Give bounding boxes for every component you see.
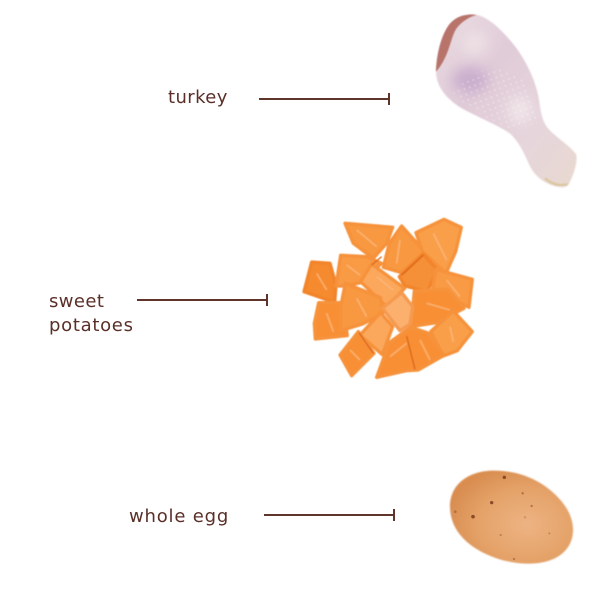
icon: sweet potato cubes <box>304 219 472 377</box>
connector line: sweet potatoes <box>137 294 267 306</box>
icon: egg <box>450 471 573 564</box>
connector line: turkey <box>259 93 389 105</box>
label: sweet potatoes <box>49 291 134 336</box>
label: sweet potatoes: potatoes <box>49 315 134 336</box>
label: sweet potatoes: sweet <box>49 291 104 312</box>
label: whole egg: whole egg <box>129 506 229 527</box>
connector line: whole egg <box>264 509 394 521</box>
icon: turkey drumstick <box>436 14 577 187</box>
label: turkey: turkey <box>168 87 228 108</box>
